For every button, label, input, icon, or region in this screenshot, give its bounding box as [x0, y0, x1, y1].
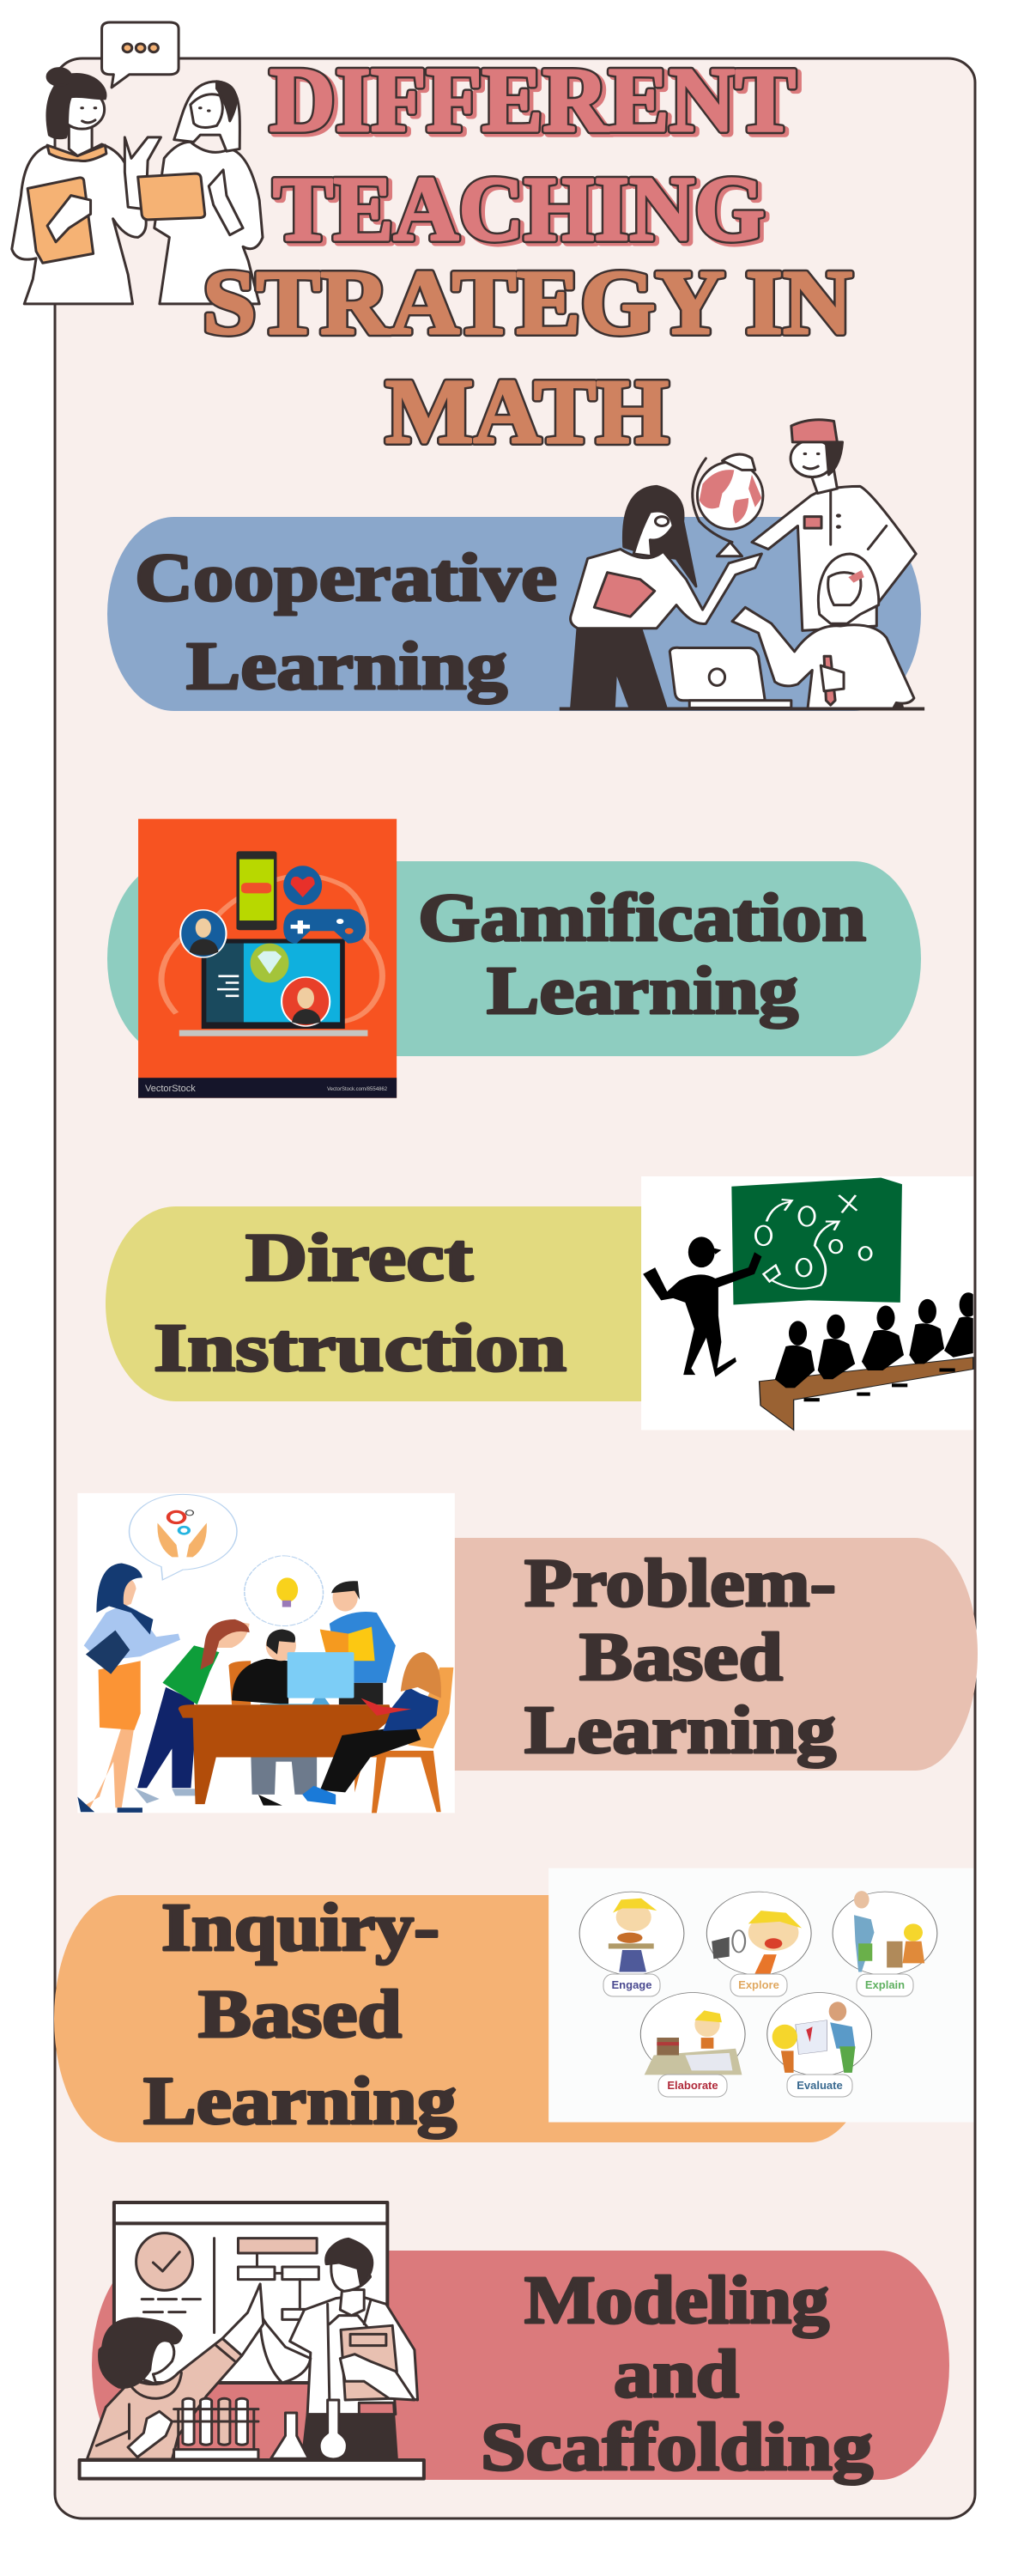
standing woman [77, 1564, 180, 1813]
teacher silhouette [643, 1236, 761, 1377]
label: modeling and scaffolding [481, 2263, 873, 2485]
title line: different teaching [270, 50, 796, 260]
image footer text: VectorStock [145, 1084, 196, 1094]
students silhouettes [775, 1292, 985, 1401]
icon: laptop [670, 647, 791, 708]
icon: heart [283, 866, 322, 905]
chairs [228, 1661, 453, 1813]
avatar: man two [282, 977, 330, 1026]
label: problem-based learning: Learning [524, 1693, 836, 1768]
label: modeling and scaffolding: and [614, 2337, 739, 2412]
circle: engage [579, 1892, 684, 1975]
figure: man in lab coat [257, 2239, 418, 2459]
image: 5E inquiry model cartoons [548, 1868, 973, 2123]
image footer text: VectorStock.com/8554862 [327, 1087, 388, 1092]
title line: different teaching: DIFFERENT [270, 50, 796, 151]
icon: diamond [251, 944, 289, 982]
pill: modeling and scaffolding [92, 2251, 949, 2480]
title outline: MATH [385, 361, 669, 463]
figure: teacher with long hair [124, 82, 263, 304]
circle: evaluate [767, 1993, 872, 2075]
icon: laptop [179, 939, 367, 1036]
figure: man with red hat [752, 420, 916, 630]
illustration: two teachers with tablets [12, 22, 263, 304]
illustration: students with globe and laptop [560, 420, 924, 708]
woman in green [134, 1619, 250, 1803]
image: team working around table [77, 1493, 455, 1813]
circle: elaborate [640, 1993, 745, 2075]
title shadow: TEACHING [276, 161, 768, 263]
label: inquiry-based learning: Learning [143, 2064, 457, 2139]
standing man with yellow book [320, 1581, 396, 1704]
title outline: STRATEGY IN [203, 252, 852, 354]
circle: explore [706, 1892, 811, 1975]
label: inquiry-based learning: Inquiry- [161, 1891, 439, 1965]
pill: inquiry-based learning [54, 1895, 876, 2142]
image: gamification devices on orange [138, 819, 397, 1098]
icon: test tube rack [174, 2398, 258, 2459]
image footer bar [138, 1078, 397, 1098]
circle: explain [833, 1891, 937, 1975]
icon: speech bubble [102, 22, 179, 88]
tags: 5E stage labels: Evaluate [797, 2079, 843, 2092]
label: direct instruction: Direct [245, 1221, 473, 1296]
presentation board [114, 2202, 387, 2383]
figure: girl with pencil [732, 554, 914, 708]
title line: strategy in math [203, 252, 852, 463]
title line: strategy in math: STRATEGY IN [203, 252, 852, 354]
icon: globe [693, 454, 763, 556]
seated man at computer [232, 1630, 317, 1806]
seated woman with open book [302, 1652, 441, 1805]
title line: strategy in math: MATH [385, 361, 669, 463]
bench [760, 1358, 973, 1430]
chalkboard [731, 1178, 902, 1304]
label: problem-based learning: Based [579, 1620, 783, 1695]
label: inquiry-based learning: Based [198, 1978, 402, 2052]
table [179, 1704, 392, 1804]
tags: 5E stage labels [603, 1974, 913, 2097]
label: gamification learning: Gamification [418, 881, 866, 956]
pill: direct instruction [106, 1206, 652, 1401]
title shadow: DIFFERENT [273, 52, 799, 154]
figure: teacher with bun [12, 69, 146, 304]
label: modeling and scaffolding: Scaffolding [481, 2410, 873, 2485]
icon: round flask [319, 2400, 347, 2459]
icon: phone [236, 851, 276, 930]
label: cooperative learning: Cooperative [135, 541, 557, 616]
pill: gamification learning [107, 861, 921, 1056]
thought bubble: hands and gears [130, 1494, 237, 1580]
tags: 5E stage labels: Engage [612, 1978, 651, 1991]
label: problem-based learning: Problem- [524, 1546, 836, 1621]
image: teacher at chalkboard with students [641, 1176, 985, 1430]
label: inquiry-based learning [143, 1891, 457, 2139]
title outline [203, 50, 852, 463]
illustration: high five in the science lab [80, 2202, 424, 2479]
title shadow [273, 52, 799, 263]
title [203, 50, 852, 463]
thought bubble: light bulb [245, 1556, 323, 1625]
title line: different teaching: TEACHING [273, 159, 765, 260]
avatar: man one [180, 910, 227, 957]
title outline: TEACHING [273, 159, 765, 260]
figure: woman with raised hand [87, 2284, 264, 2459]
tags: 5E stage labels: Elaborate [667, 2079, 718, 2092]
label: direct instruction: Instruction [154, 1311, 566, 1386]
label: problem-based learning [524, 1546, 836, 1768]
pill: cooperative learning [107, 517, 921, 711]
title outline: DIFFERENT [270, 50, 796, 151]
label: cooperative learning [135, 541, 557, 704]
label: modeling and scaffolding: Modeling [524, 2263, 829, 2338]
tags: 5E stage labels: Explore [738, 1978, 779, 1991]
ground line [560, 707, 924, 710]
label: cooperative learning: Learning [186, 629, 507, 704]
figure: woman with glasses [571, 486, 761, 708]
monitor [260, 1652, 354, 1707]
label: gamification learning [418, 881, 866, 1029]
lab desk [80, 2460, 424, 2479]
label: gamification learning: Learning [487, 954, 798, 1029]
image footer text [145, 1084, 388, 1094]
icon: cloud outline [161, 875, 382, 1022]
tags: 5E stage labels: Explain [865, 1978, 905, 1991]
label: direct instruction [154, 1221, 566, 1386]
icon: conical flask [271, 2413, 309, 2458]
pill: problem-based learning [429, 1538, 978, 1771]
icon: game controller [283, 909, 366, 944]
